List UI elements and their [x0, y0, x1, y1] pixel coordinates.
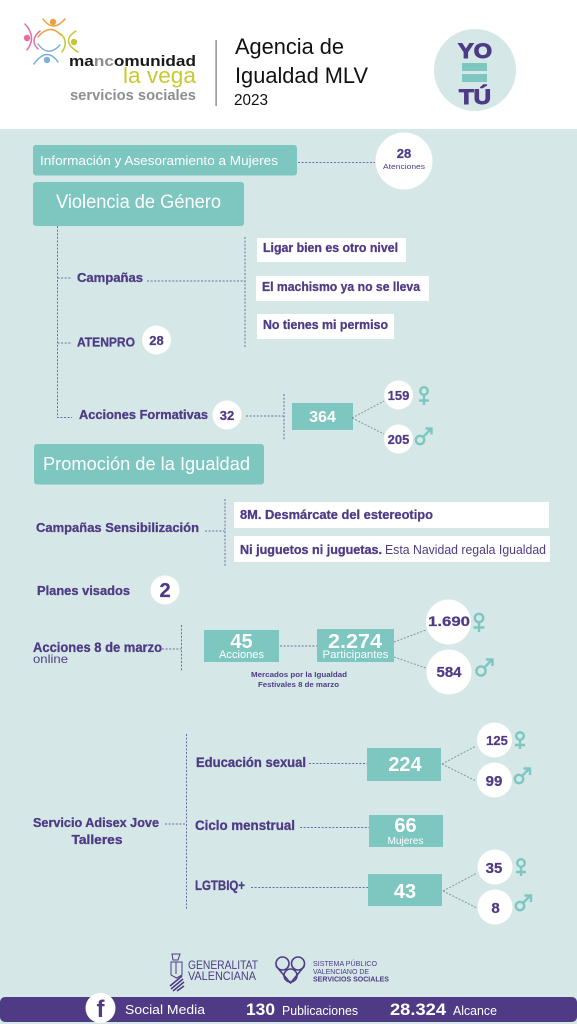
campaign: 8M — [234, 502, 549, 528]
ciclo menstrual: Mujeres — [388, 836, 424, 847]
icon: female — [516, 859, 526, 876]
heading: violencia de género — [33, 182, 244, 226]
heading: promoción de la igualdad: Promoción de la Igualdad — [43, 453, 250, 474]
educación sexual: 99 — [486, 773, 502, 790]
logo: sistema público: SISTEMA PÚBLICO — [313, 959, 377, 968]
campaign: ni juguetos: Ni juguetos ni juguetas. — [240, 542, 382, 557]
campaign: machismo: El machismo ya no se lleva — [262, 279, 421, 294]
educación sexual — [196, 722, 530, 798]
servicio adisex jove: Servicio Adisex Jove — [33, 815, 159, 830]
campaign: ligar bien — [257, 238, 406, 262]
campaign: ni juguetos: Esta Navidad regala Igualdad — [385, 543, 546, 557]
logo: sistema público — [276, 957, 389, 984]
lgtbiq+ — [195, 850, 531, 924]
icon: four figures — [24, 19, 78, 64]
lgtbiq+: 35 — [486, 860, 502, 877]
logo: generalitat valenciana: GENERALITAT — [188, 958, 259, 972]
acciones 8 de marzo: 1.690 — [428, 613, 470, 629]
title: 2023 — [234, 92, 268, 109]
icon: female — [474, 614, 484, 632]
stat: participantes — [317, 629, 394, 662]
logo: generalitat valenciana — [170, 954, 259, 991]
acciones formativas: 205 — [388, 432, 409, 447]
acciones 8 de marzo — [33, 600, 492, 694]
footer bar: social media: 28.324 — [390, 1001, 447, 1019]
icon: male — [516, 896, 531, 910]
logo: YO = TÚ — [434, 29, 516, 111]
logo: YO = TÚ: YO — [458, 40, 492, 63]
ciclo menstrual: Ciclo menstrual — [195, 818, 295, 833]
lgtbiq+: LGTBIQ+ — [195, 878, 245, 893]
logo: YO = TÚ: TÚ — [459, 85, 491, 109]
icon: male — [416, 428, 432, 444]
icon: coat of arms — [170, 954, 184, 991]
campañas sensibilización: Campañas Sensibilización — [36, 520, 199, 535]
note: mercados — [251, 672, 347, 689]
educación sexual: 125 — [486, 733, 508, 748]
atenpro: ATENPRO — [77, 334, 135, 350]
stat: 45 acciones — [204, 630, 279, 662]
title: Igualdad MLV — [235, 63, 368, 88]
acciones formativas — [79, 380, 432, 454]
logo: generalitat valenciana: VALENCIANA — [188, 969, 256, 983]
footer bar: social media — [0, 993, 577, 1023]
header band — [0, 0, 577, 129]
logo: sistema público: SERVICIOS SOCIALES — [313, 974, 389, 984]
acciones 8 de marzo: 584 — [436, 664, 462, 681]
heading: promoción de la igualdad — [34, 444, 264, 484]
stat: 45 acciones: 45 — [230, 631, 253, 653]
acciones formativas: 159 — [388, 388, 409, 403]
acciones 8 de marzo: Acciones 8 de marzo — [33, 640, 162, 655]
campaign: 8M: 8M. Desmárcate del estereotipo — [240, 507, 433, 522]
atenpro — [77, 326, 171, 354]
campañas — [77, 237, 429, 347]
acciones formativas: 32 — [220, 408, 234, 423]
note: mercados: Festivales 8 de marzo — [258, 682, 339, 689]
title — [234, 34, 368, 109]
campaign: machismo — [256, 276, 429, 301]
ciclo menstrual — [195, 815, 443, 847]
campañas: Campañas — [77, 270, 143, 285]
panel: información y asesoramiento: Atenciones — [383, 162, 425, 171]
acciones formativas: 364 — [309, 409, 336, 426]
ciclo menstrual: 66 — [394, 815, 417, 837]
icon: female — [515, 732, 525, 749]
footer bar: social media: Social Media — [125, 1002, 206, 1017]
logo: sistema público: VALENCIANO DE — [313, 967, 369, 976]
servicio adisex jove — [0, 722, 577, 1023]
stat: participantes: Participantes — [322, 649, 389, 661]
lgtbiq+: 8 — [491, 900, 500, 917]
panel: información y asesoramiento: Información y Asesoramiento a Mujeres — [40, 153, 279, 168]
campaign: no tienes — [257, 314, 394, 339]
title: Agencia de — [235, 34, 344, 59]
icon: facebook — [86, 993, 116, 1023]
planes visados — [37, 576, 180, 604]
lgtbiq+: 43 — [394, 881, 416, 903]
logo: mancomunidad la vega — [24, 19, 197, 104]
stat: 45 acciones: Acciones — [219, 649, 264, 661]
campaign: ligar bien: Ligar bien es otro nivel — [263, 240, 398, 255]
panel: información y asesoramiento — [33, 132, 432, 190]
planes visados: 2 — [159, 580, 171, 602]
stat: participantes: 2.274 — [328, 631, 383, 653]
icon: female — [419, 387, 429, 405]
panel: información y asesoramiento: 28 — [397, 146, 411, 161]
heading: violencia de género: Violencia de Género — [56, 192, 221, 213]
educación sexual: Educación sexual — [196, 755, 306, 770]
acciones 8 de marzo: online — [33, 652, 68, 666]
footer bar: social media: Alcance — [453, 1004, 497, 1018]
footer bar: social media: 130 — [246, 1001, 275, 1019]
acciones formativas: Acciones Formativas — [79, 407, 208, 422]
logo: mancomunidad la vega: mancomunidad — [69, 53, 196, 70]
campaign: ni juguetos — [234, 536, 550, 562]
servicio adisex jove: Talleres — [72, 832, 122, 847]
planes visados: Planes visados — [37, 583, 130, 598]
icon: three circles — [276, 957, 304, 983]
campañas sensibilización — [36, 499, 550, 567]
icon: male — [476, 660, 492, 676]
atenpro: 28 — [149, 333, 164, 348]
note: mercados: Mercados por la Igualdad — [251, 672, 347, 679]
logo: mancomunidad la vega: servicios sociales — [70, 87, 196, 104]
footer bar: social media: Publicaciones — [282, 1004, 358, 1018]
icon: male — [515, 768, 530, 783]
campaign: no tienes: No tienes mi permiso — [263, 317, 388, 332]
logo: mancomunidad la vega: la vega — [123, 63, 197, 88]
icon: facebook: f — [96, 996, 106, 1023]
educación sexual: 224 — [388, 754, 423, 776]
